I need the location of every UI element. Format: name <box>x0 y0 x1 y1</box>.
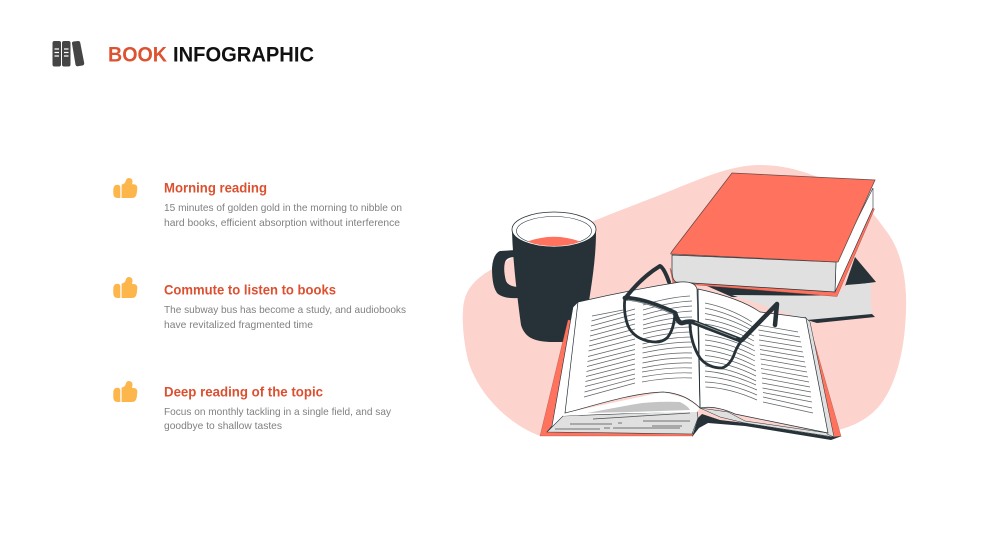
description <box>164 304 406 331</box>
title: INFOGRAPHIC <box>173 44 314 66</box>
right lens rim <box>690 325 742 368</box>
lower book <box>707 257 876 323</box>
rim highlight <box>628 300 736 338</box>
right page <box>698 289 828 433</box>
background blob <box>463 165 906 436</box>
description: hard books, efficient absorption without interference <box>164 217 400 229</box>
mug body <box>512 232 596 342</box>
page curl shading <box>587 402 690 413</box>
right cover <box>805 321 841 438</box>
heading: Morning reading <box>164 180 267 196</box>
heading: Deep reading of the topic <box>164 384 323 400</box>
left temple <box>627 266 669 296</box>
mug handle <box>492 250 518 298</box>
left page edge <box>547 302 578 432</box>
left lens rim <box>624 298 675 342</box>
description: The subway bus has become a study, and audiobooks <box>164 304 406 316</box>
icon: books logo <box>52 41 84 66</box>
glasses <box>624 266 777 368</box>
spine <box>698 289 700 408</box>
coffee mug <box>492 212 596 342</box>
heading: Commute to listen to books <box>164 282 336 298</box>
page curl band <box>563 392 700 416</box>
illustration: books and coffee <box>463 165 906 440</box>
left page <box>565 282 700 413</box>
top book <box>670 173 875 296</box>
icon: thumbs up <box>113 277 137 298</box>
item: morning reading <box>113 178 402 229</box>
page edge marks <box>555 413 690 429</box>
description <box>164 202 402 229</box>
right temple <box>742 304 777 340</box>
icon: thumbs up <box>113 178 137 198</box>
right page edge <box>805 317 834 437</box>
icon: thumbs up <box>113 381 137 402</box>
coffee <box>528 237 580 246</box>
mug rim <box>512 212 596 247</box>
description: goodbye to shallow tastes <box>164 420 282 432</box>
lower right page stack <box>700 408 834 437</box>
title <box>108 44 314 66</box>
open book <box>540 282 842 440</box>
base shadow <box>692 414 842 440</box>
title: BOOK <box>108 44 167 66</box>
item: commute <box>113 277 406 331</box>
description: Focus on monthly tackling in a single field, and say <box>164 406 392 418</box>
description: 15 minutes of golden gold in the morning to nibble on <box>164 202 402 214</box>
lower left page stack <box>547 411 698 434</box>
item: deep reading <box>113 381 392 432</box>
description <box>164 406 392 432</box>
left cover <box>540 320 693 436</box>
top bar <box>625 298 740 340</box>
text lines <box>584 296 813 413</box>
description: have revitalized fragmented time <box>164 319 313 331</box>
